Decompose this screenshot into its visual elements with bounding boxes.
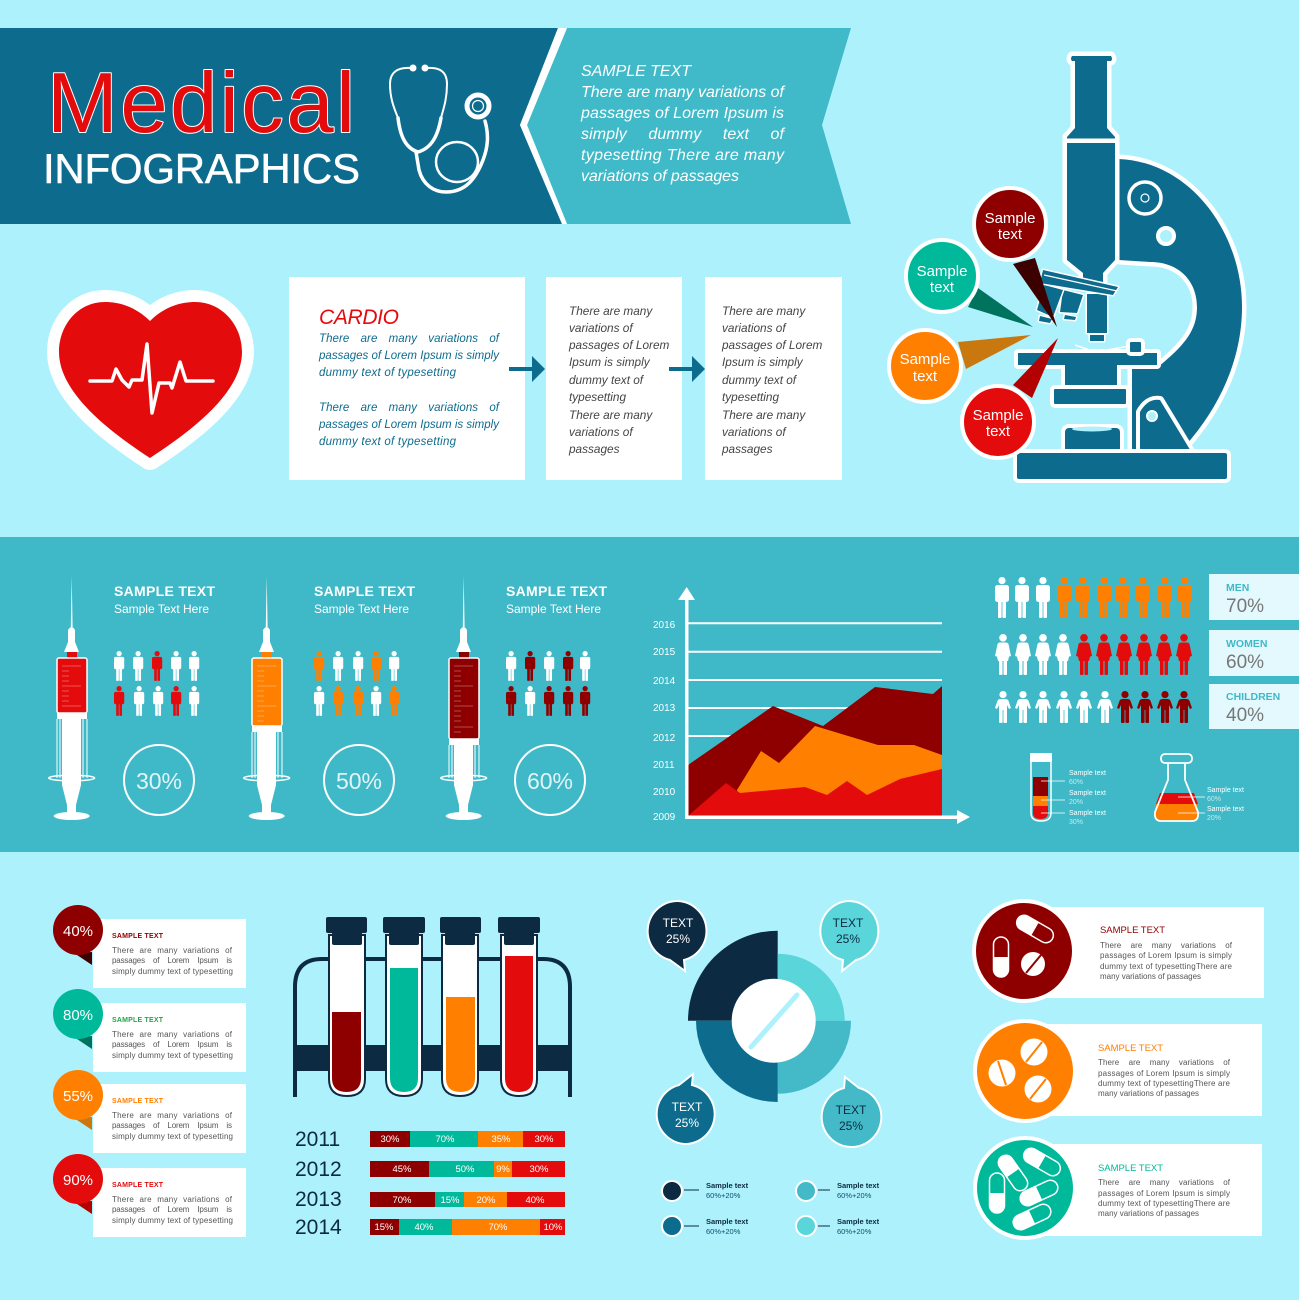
callout tails [1013,258,1057,327]
callout: orange sample text: Sample [900,351,950,368]
card: 80%: passages of Lorem Ipsum is [112,1040,232,1049]
panel: text card 1: variations of [569,425,634,439]
year axis labels: 2011 [653,760,675,771]
icon: mini test tube with labels: 30% [1069,819,1083,826]
year axis labels: 2012 [653,733,676,744]
pictogram: children row [995,691,1192,723]
callout: dark red sample text [974,188,1046,260]
callout bubble: navy [648,901,706,971]
card: 55%: passages of Lorem Ipsum is [112,1121,232,1130]
segment: light teal [778,954,845,1021]
panel: women stat [1209,630,1299,676]
callout bubble: light teal: TEXT [833,916,864,930]
area: dark red series [688,686,942,816]
callout bubble: teal: 25% [839,1119,863,1133]
heading: SAMPLE TEXT [114,583,215,599]
panel: children stat: CHILDREN [1226,691,1280,703]
rack frame [295,959,570,1097]
card: 90%: 90% [63,1172,93,1189]
row 2014: 10% [543,1222,563,1233]
pictogram: women row [995,634,1192,675]
card: 80%: There are many variations of [112,1030,233,1039]
panel: women stat: 60% [1226,652,1264,673]
stacked bar chart [295,1128,565,1239]
icon: microscope with callouts [889,56,1242,479]
icon: red syringe [49,576,95,820]
microscope details [1044,182,1174,432]
card: orange pills: dummy text of typesettingThere are [1098,1079,1231,1088]
stat circle 30% [124,745,194,815]
legend: donut [662,1181,880,1236]
header banner [0,28,851,224]
card: 80%: 80% [63,1007,93,1024]
card: 40%: 40% [63,923,93,940]
pictogram: men row [995,577,1192,618]
callout: green sample text: text [930,279,955,296]
arrow: text 1 to text 2 [669,356,705,382]
stat circle 60%: 60% [527,768,573,794]
card: 40%: There are many variations of [112,946,233,955]
icon: flask with labels [1155,754,1244,822]
header text block: passages of Lorem Ipsum is [580,105,784,122]
icon: capsules and tablet [994,913,1056,977]
chevron white edge [520,28,567,224]
legend: donut: 60%+20% [706,1227,741,1236]
panel: text card 1: There are many [569,408,653,422]
header text block: simply dummy text of [581,126,786,143]
card: orange pills [975,1021,1262,1121]
callout bubble: navy: 25% [666,932,690,946]
icon: flask with labels: 20% [1207,815,1221,822]
subheading: Sample Text Here [506,602,601,616]
callout: green sample text: Sample [917,263,967,280]
card: dark red pills: dummy text of typesettingThere are [1100,962,1233,971]
area chart [653,587,970,824]
microscope objectives [1037,270,1118,341]
tube: dark red [326,917,367,1096]
callout bubble: navy: TEXT [663,916,694,930]
panel: text card 1 [546,277,682,480]
row 2012: 50% [455,1164,475,1175]
icon: flask with labels: Sample text [1207,806,1244,813]
callout bubble: blue: 25% [675,1116,699,1130]
pictogram: people 30% [114,651,199,716]
row 2012: 2012 [295,1158,342,1181]
panel: text card 1: variations of [569,321,634,335]
stat circle 50% [324,745,394,815]
panel: text card 2: dummy text of [722,373,798,387]
chart: pill donut [688,931,851,1102]
row 2014: 2014 [295,1216,342,1239]
panel: text card 2: passages [721,442,773,456]
pictogram: people 60% [506,651,590,716]
card: 55% [53,1070,246,1153]
syringe column 1 [49,576,215,820]
text block: cardio paragraphs: dummy text of typesetting [319,436,457,448]
row 2012: 30% [529,1164,549,1175]
card: 55%: 55% [63,1088,93,1105]
card: dark red pills: There are many variations of [1100,941,1233,950]
microscope stage and base [1017,342,1227,479]
title: Medical: Medical [47,56,355,151]
card: orange pills: SAMPLE TEXT [1098,1043,1163,1054]
legend: donut: 60%+20% [837,1227,872,1236]
legend: donut: Sample text [706,1217,749,1226]
legend: donut: 60%+20% [837,1191,872,1200]
card: green pills: many variations of passages [1098,1209,1199,1218]
callout: red sample text [962,386,1034,458]
panel: text card 2 [705,277,842,480]
chart axes and arrows [678,587,970,824]
tube: green [383,917,425,1096]
panel: title banner [0,28,562,224]
panel: children stat: 40% [1226,705,1264,726]
icon: flask with labels: Sample text [1207,787,1244,794]
row 2011: 30% [534,1134,554,1145]
icon: capsules [990,1146,1063,1232]
card: 90%: There are many variations of [112,1195,233,1204]
icon: stethoscope [390,64,489,192]
legend: donut: Sample text [706,1181,749,1190]
year axis labels: 2010 [653,787,676,798]
row 2013: 2013 [295,1188,342,1211]
card: 90%: simply dummy text of typesetting [112,1216,233,1225]
panel: text card 2: Ipsum is simply [722,355,804,369]
row 2013: 15% [440,1195,460,1206]
card: 90%: SAMPLE TEXT [112,1182,164,1189]
subheading: Sample Text Here [314,602,409,616]
card: orange pills: passages of Lorem Ipsum is simply [1098,1069,1230,1078]
row 2013 [295,1188,565,1211]
row 2014: 40% [414,1222,434,1233]
panel: data band [0,537,1299,852]
icon: mini test tube with labels: 20% [1069,799,1083,806]
callout bubble: teal: TEXT [836,1103,867,1117]
panel: text card 1: passages of Lorem [568,338,670,352]
card: 40%: SAMPLE TEXT [112,933,164,940]
icon: heart with pulse [59,302,242,458]
card: green pills: SAMPLE TEXT [1098,1163,1163,1174]
segment: teal [778,1021,851,1094]
row 2014 [295,1216,565,1239]
panel: cardio [289,277,525,480]
row 2014: 15% [374,1222,394,1233]
heading: SAMPLE TEXT [506,583,607,599]
callout: green sample text [906,240,978,312]
text block: cardio paragraphs: There are many variations of [319,402,501,414]
callout bubble: teal [822,1077,881,1147]
panel: men stat: MEN [1226,582,1249,594]
panel: text card 2: passages of Lorem [721,338,823,352]
text block: cardio paragraphs [318,333,501,448]
legend: donut: Sample text [837,1181,880,1190]
panel: men stat [1209,574,1299,620]
year axis labels [653,620,676,823]
panel: text card 2: There are many [722,408,806,422]
card: green pills [975,1138,1262,1238]
panel: text card 2: variations of [722,425,787,439]
card: green pills: dummy text of typesettingThere are [1098,1199,1231,1208]
card: 80%: simply dummy text of typesetting [112,1051,233,1060]
panel: children stat [1209,684,1299,729]
callout bubble: blue [657,1074,715,1144]
callout: dark red sample text: text [998,226,1023,243]
callout: orange sample text [889,330,961,402]
icon: mini test tube with labels: Sample text [1069,790,1106,797]
row 2013: 70% [392,1195,412,1206]
panel: text card 1: typesetting [569,390,626,404]
row 2012: 45% [392,1164,412,1175]
arrow: cardio to text 1 [509,356,545,382]
card: green pills: There are many variations of [1098,1178,1231,1187]
card: 40% [53,905,246,988]
header text block: typesetting There are many [581,147,785,164]
subheading: Sample Text Here [114,602,209,616]
area: red series [688,769,942,816]
year axis labels: 2015 [653,647,676,658]
panel: text card 2: typesetting [722,390,779,404]
panel: text card 1: Ipsum is simply [569,355,651,369]
callout: dark red sample text: Sample [985,210,1035,227]
title: Infographics: INFOGRAPHICS [43,145,360,192]
year axis labels: 2013 [653,703,676,714]
card: dark red pills [974,901,1264,1001]
segment: navy [688,931,778,1021]
year axis labels: 2016 [653,620,676,631]
heading: cardio: CARDIO [319,306,399,329]
panel: men stat: 70% [1226,596,1264,617]
card: green pills: passages of Lorem Ipsum is simply [1098,1189,1230,1198]
heading: SAMPLE TEXT [314,583,415,599]
text block: cardio paragraphs: passages of Lorem Ipsum is simply [318,419,500,431]
stat circle 50%: 50% [336,768,382,794]
card: 55%: SAMPLE TEXT [112,1098,164,1105]
card: 90% [53,1154,246,1237]
syringe column 2 [244,576,415,820]
stat circle 30%: 30% [136,768,182,794]
panel: text card 1: dummy text of [569,373,645,387]
card: 40%: passages of Lorem Ipsum is [112,956,232,965]
card: orange pills: There are many variations of [1098,1058,1231,1067]
microscope body [1067,56,1242,456]
area: orange series [737,726,942,800]
header text block [580,63,786,185]
segment: blue [696,1021,778,1102]
grid lines [688,623,942,765]
legend: donut: Sample text [837,1217,880,1226]
callout: orange sample text: text [913,368,938,385]
text block: cardio paragraphs: passages of Lorem Ipsum is simply [318,350,500,362]
icon: center pill [732,979,816,1063]
year axis labels: 2009 [653,812,676,823]
row 2013: 40% [525,1195,545,1206]
legend: donut: 60%+20% [706,1191,741,1200]
icon: flask with labels: 60% [1207,796,1221,803]
syringe column 3 [441,576,607,820]
card: 40%: simply dummy text of typesetting [112,967,233,976]
panel: women stat: WOMEN [1226,638,1267,650]
panel: text card 1: passages [568,442,620,456]
card: 90%: passages of Lorem Ipsum is [112,1205,232,1214]
card: 55%: simply dummy text of typesetting [112,1132,233,1141]
icon: mini test tube with labels: Sample text [1069,770,1106,777]
header text block: variations of passages [581,168,739,185]
row 2011: 2011 [295,1128,340,1151]
tube: red [498,917,540,1096]
card: orange pills: many variations of passages [1098,1089,1199,1098]
callout bubble: blue: TEXT [672,1100,703,1114]
header text block: There are many variations of [581,84,786,101]
row 2011: 35% [491,1134,511,1145]
icon: tablets [988,1038,1052,1102]
callout bubble: light teal [820,901,878,971]
callout bubble: light teal: 25% [836,932,860,946]
icon: dark red syringe [441,576,487,820]
header text block: SAMPLE TEXT [581,63,692,80]
text block: cardio paragraphs: There are many variations of [319,333,501,345]
row 2012 [295,1158,565,1181]
pictogram: people 50% [314,651,399,716]
card: 55%: There are many variations of [112,1111,233,1120]
card: dark red pills: passages of Lorem Ipsum is simply [1100,951,1232,960]
card: 80%: SAMPLE TEXT [112,1017,164,1024]
text block: cardio paragraphs: dummy text of typesetting [319,367,457,379]
card: dark red pills: SAMPLE TEXT [1100,925,1165,936]
callout: red sample text: text [986,423,1011,440]
panel: header chevron [527,28,851,224]
row 2012: 9% [496,1164,510,1175]
icon: orange syringe [244,576,290,820]
card: 80% [53,989,246,1072]
icon: mini test tube with labels: 60% [1069,779,1083,786]
row 2014: 70% [488,1222,508,1233]
icon: mini test tube with labels: Sample text [1069,810,1106,817]
icon: mini test tube with labels [1030,753,1106,826]
row 2011 [295,1128,565,1151]
tube: orange [440,917,481,1096]
icon: test tube rack [295,917,570,1097]
panel: text card 2: There are many [722,304,806,318]
year axis labels: 2014 [653,676,676,687]
row 2011: 70% [435,1134,455,1145]
panel: text card 1: There are many [569,304,653,318]
row 2013: 20% [476,1195,496,1206]
row 2011: 30% [380,1134,400,1145]
callout: red sample text: Sample [973,407,1023,424]
stat circle 60% [515,745,585,815]
card: dark red pills: many variations of passages [1100,972,1201,981]
panel: text card 2: variations of [722,321,787,335]
